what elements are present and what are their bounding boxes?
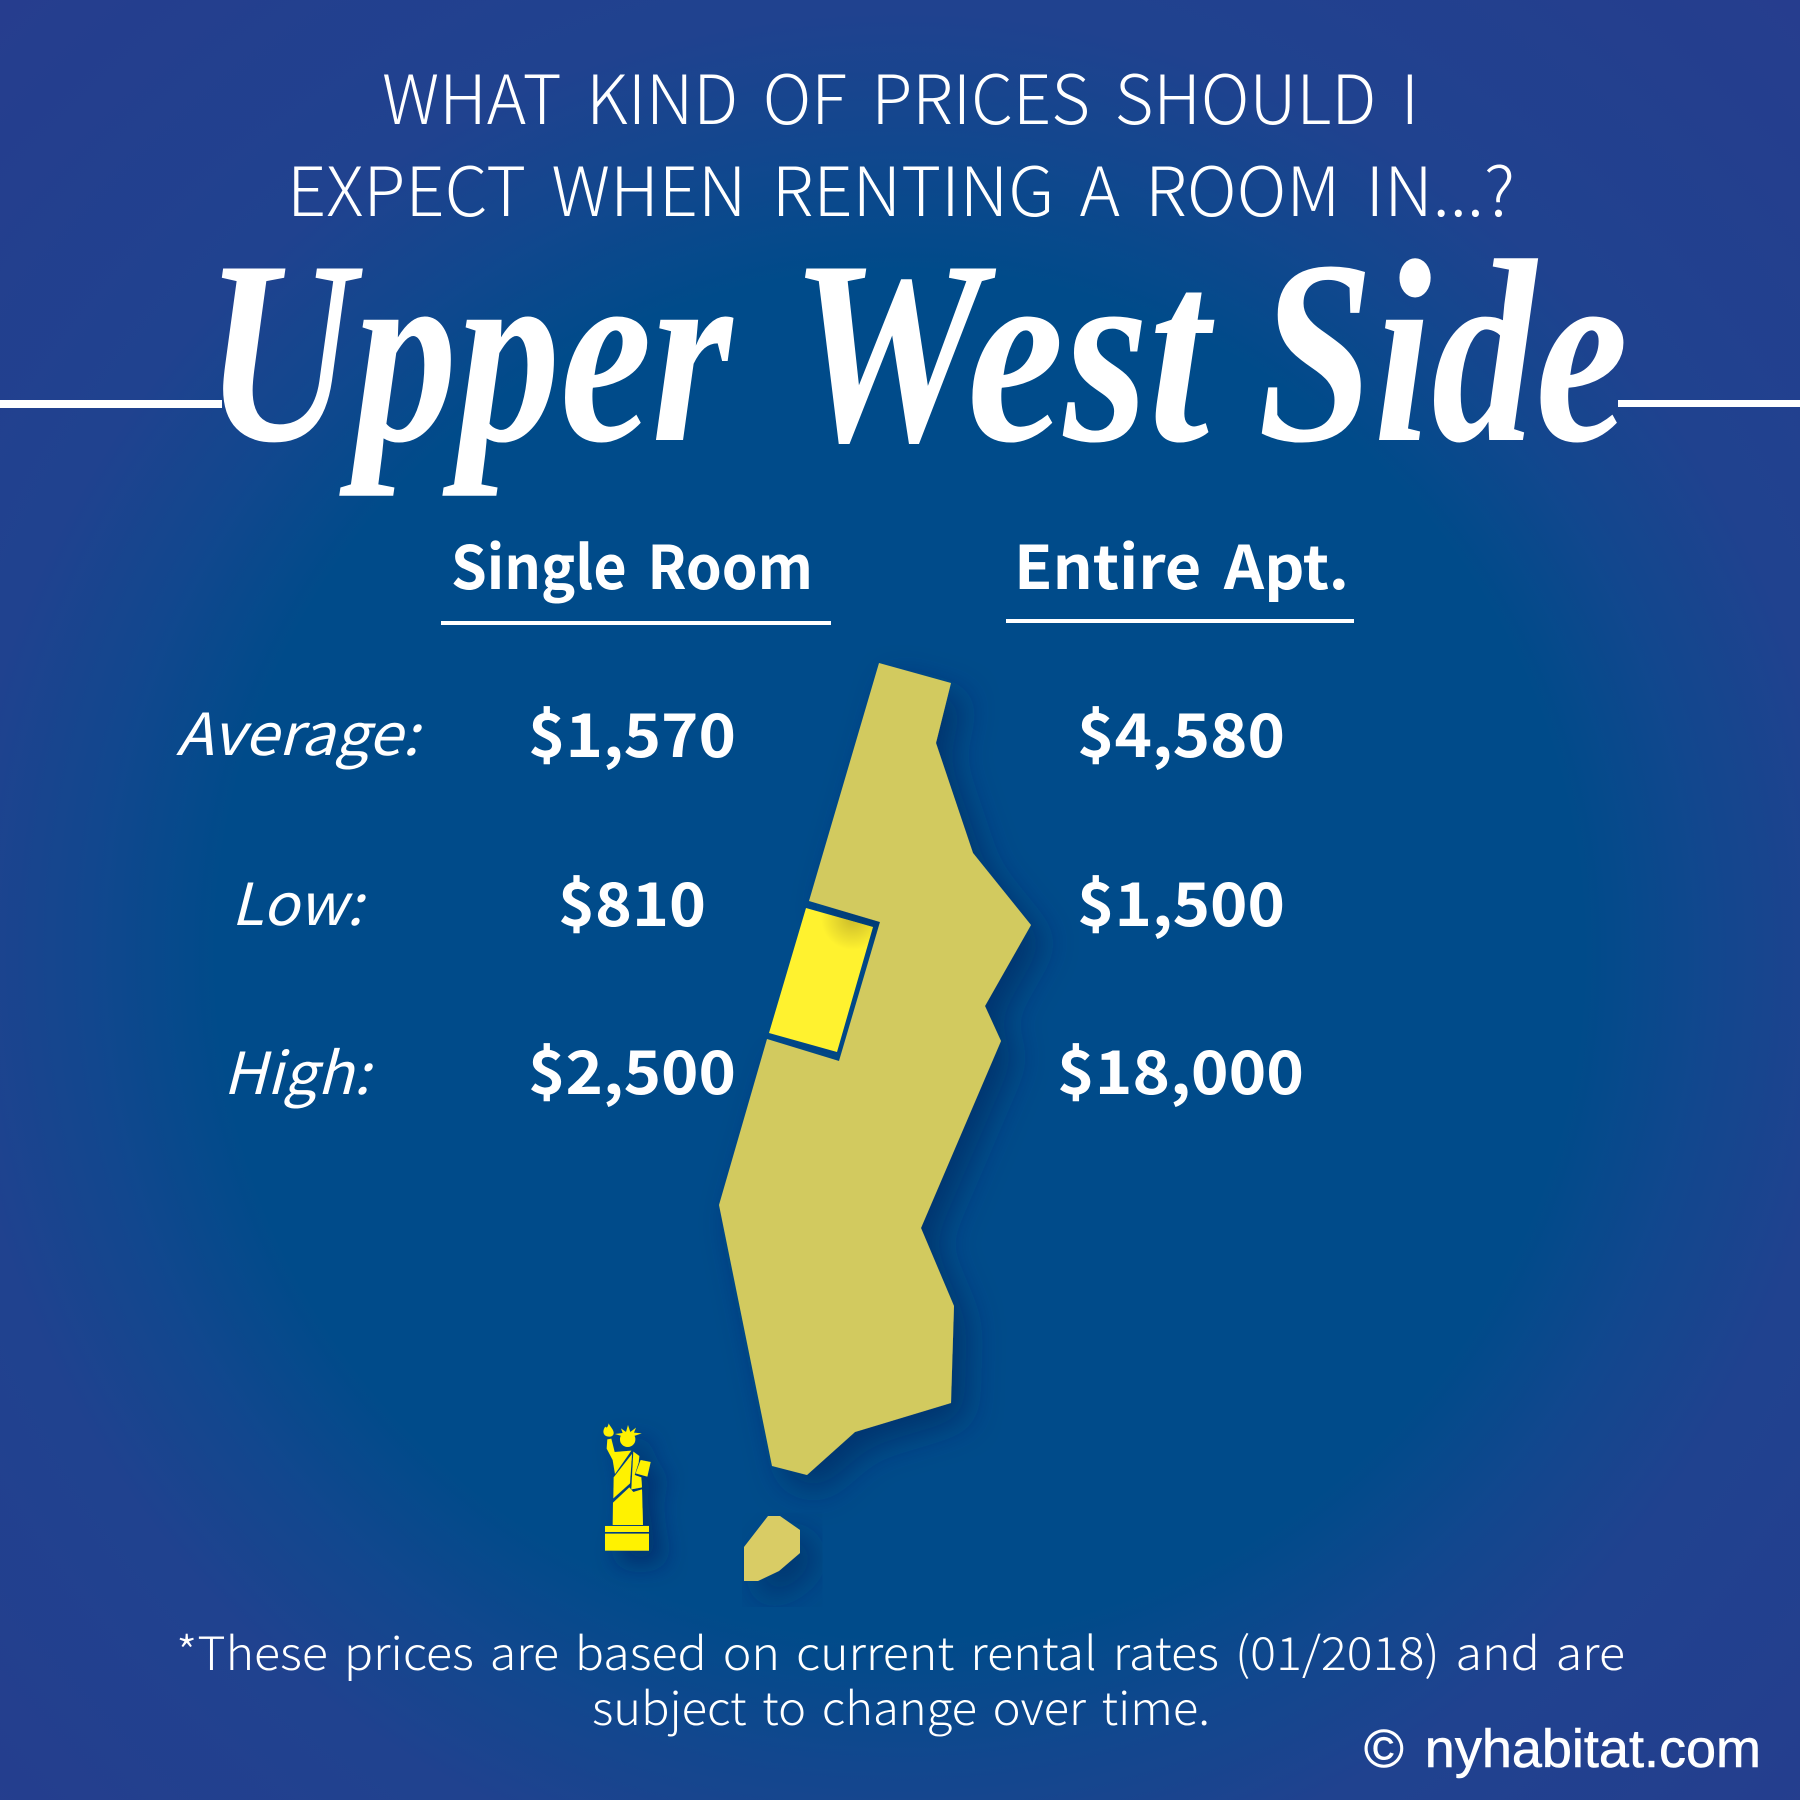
title rule right	[1618, 400, 1800, 407]
highlighted neighbourhood: Upper West Side	[769, 908, 873, 1052]
footnote: *These prices are based on current rental rates (01/2018) and are	[176, 1618, 1625, 1684]
title: Upper West Side: West	[790, 207, 1217, 497]
title rule left	[0, 400, 222, 408]
map of Manhattan	[719, 663, 1031, 1475]
row label: Average: Average:	[176, 688, 423, 772]
copyright: © nyhabitat.com	[1364, 1719, 1761, 1779]
title: Upper West Side: Side	[1258, 207, 1628, 497]
heading question: EXPECT WHEN RENTING A ROOM IN...?	[287, 137, 1515, 236]
row label: High: High:	[223, 1027, 374, 1111]
icon: Statue of Liberty	[603, 1423, 651, 1551]
title: Upper West Side: Upper	[205, 207, 736, 497]
footnote: subject to change over time.	[592, 1673, 1210, 1739]
price: single room high: $2,500	[528, 1025, 736, 1112]
price: single room average: $1,570	[528, 688, 736, 775]
price: entire apartment low: $1,500	[1077, 857, 1285, 944]
footnote	[176, 1618, 1625, 1739]
price: entire apartment average: $4,580	[1077, 688, 1285, 775]
row label: Low: Low:	[231, 858, 367, 942]
column header: Entire Apt.: Entire Apt.	[1014, 520, 1349, 607]
title: Upper West Side	[205, 207, 1628, 497]
price: single room low: $810	[558, 857, 706, 944]
column header: Single Room: Single Room	[451, 520, 813, 607]
heading question	[287, 45, 1515, 236]
map island	[744, 1516, 800, 1581]
heading question: WHAT KIND OF PRICES SHOULD I	[382, 45, 1419, 144]
price: entire apartment high: $18,000	[1057, 1025, 1304, 1112]
